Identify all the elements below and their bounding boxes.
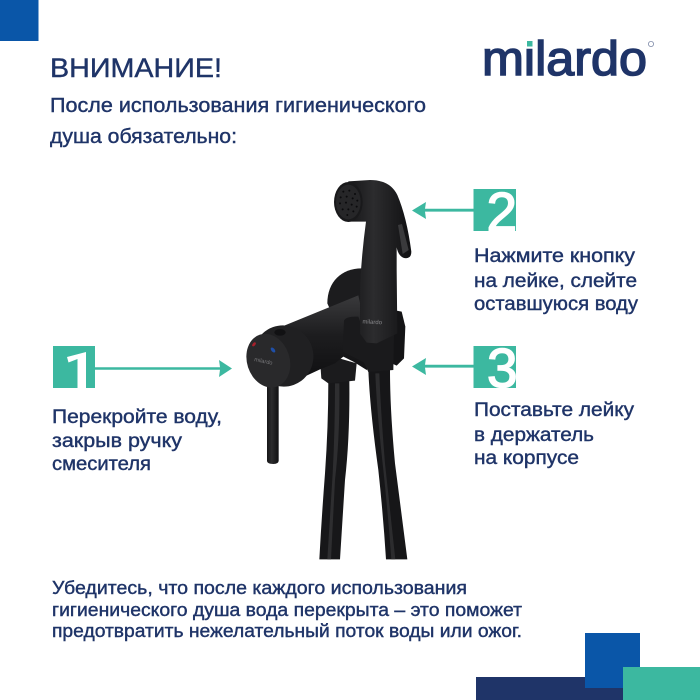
callout 3 — [412, 337, 635, 469]
text 3: в держатель — [474, 425, 594, 446]
subheading: душа обязательно: — [50, 126, 237, 148]
neck logo: milardo — [362, 319, 383, 326]
hot marker — [251, 342, 257, 347]
callout 1 — [52, 346, 232, 475]
text 2: оставшуюся воду — [474, 294, 639, 315]
bottom note: предотвратить нежелательный поток воды или ожог. — [52, 621, 522, 641]
hose left — [319, 380, 349, 559]
arrow 1 — [95, 360, 232, 377]
cap logo: milardo — [254, 357, 273, 367]
text 1: закрыв ручку — [52, 431, 183, 452]
shower trigger — [398, 224, 409, 254]
cold marker — [270, 347, 276, 353]
lever handle — [267, 383, 279, 464]
top button — [274, 329, 286, 336]
cap face — [240, 328, 297, 393]
text 3: Поставьте лейку — [474, 400, 635, 421]
text 1 — [52, 407, 222, 475]
text 3 — [474, 400, 635, 469]
text 2 — [474, 246, 639, 315]
hex nut — [321, 357, 357, 383]
text 2: Нажмите кнопку — [474, 246, 636, 267]
hose right — [368, 370, 407, 559]
cap side — [245, 317, 322, 395]
callout 2 — [412, 181, 639, 315]
product photo: black hygienic shower mixer — [240, 180, 411, 559]
badge 1 — [53, 346, 95, 388]
bottom note: Убедитесь, что после каждого использования — [52, 578, 467, 598]
subheading — [50, 95, 426, 148]
badge 3 — [474, 337, 518, 399]
subheading: После использования гигиенического — [50, 95, 426, 117]
text 1: смесителя — [52, 454, 151, 475]
decorative blocks: bottom right — [476, 633, 700, 700]
arrow 3 — [412, 358, 474, 375]
shower face — [334, 182, 363, 222]
logo: milardo: milardo — [482, 33, 647, 86]
bottom note — [52, 578, 522, 641]
badge 3: 3 — [487, 337, 518, 399]
shower head and neck — [348, 180, 411, 343]
mixer body — [283, 295, 380, 383]
heading: ВНИМАНИЕ! — [50, 53, 222, 83]
bottom note: гигиенического душа вода перекрыта – это поможет — [52, 600, 522, 620]
wall plate — [327, 268, 362, 317]
badge 1: 1 — [79, 379, 80, 381]
holder bracket — [343, 317, 394, 372]
text 1: Перекройте воду, — [52, 407, 222, 428]
badge 2: 2 — [486, 181, 517, 243]
right holder — [392, 310, 405, 366]
nozzle holes — [339, 190, 358, 216]
decorative square: top left — [0, 0, 38, 41]
arrow 2 — [412, 202, 474, 219]
text 3: на корпусе — [474, 448, 579, 469]
text 2: на лейке, слейте — [474, 271, 637, 292]
